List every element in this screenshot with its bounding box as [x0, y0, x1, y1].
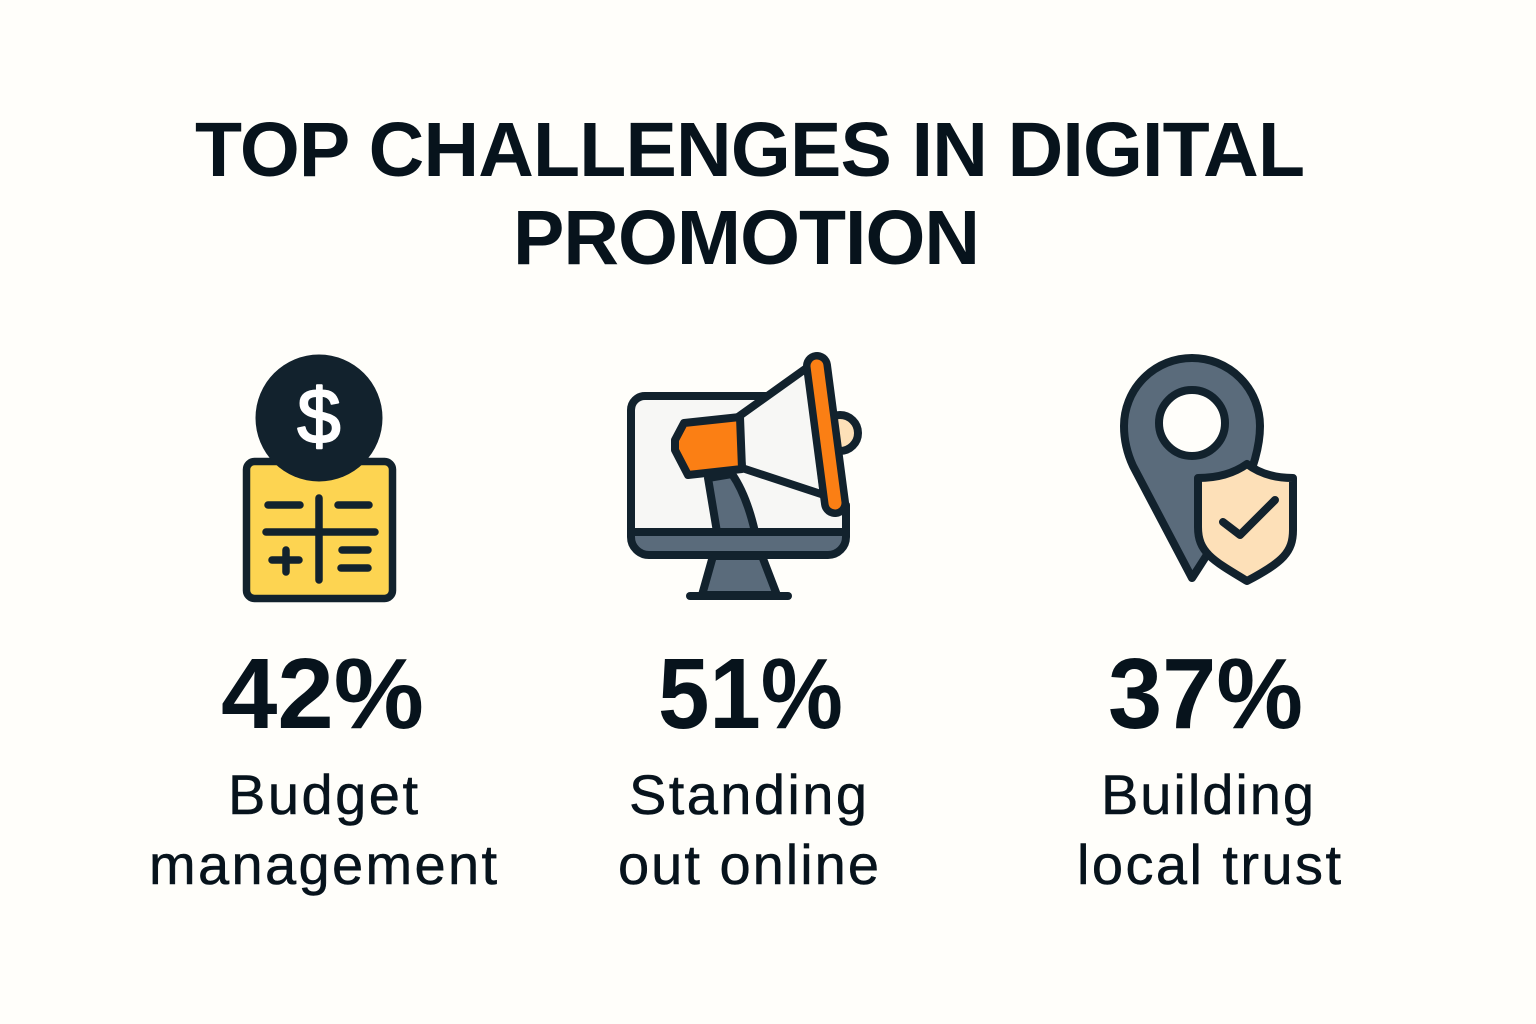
label: building local trust: Building — [1101, 763, 1314, 826]
panel: budget management — [149, 354, 497, 896]
icon: monitor with megaphone — [631, 366, 858, 596]
icon: budget calculator with dollar coin — [246, 354, 392, 598]
label: budget management: Budget — [228, 763, 418, 826]
label: building local trust — [1077, 763, 1341, 896]
stat: 51%: 51% — [658, 638, 843, 750]
panel: building local trust — [1077, 358, 1341, 896]
label: standing out online: out online — [618, 833, 879, 896]
label: budget management — [149, 763, 497, 896]
icon: location pin with shield — [1124, 358, 1293, 581]
label: standing out online: Standing — [629, 763, 867, 826]
stat: 37%: 37% — [1108, 638, 1303, 750]
label: budget management: management — [149, 833, 497, 896]
label: standing out online — [618, 763, 879, 896]
stat: 42%: 42% — [221, 638, 424, 750]
icon: budget calculator with dollar coin: $ — [297, 372, 341, 460]
panel: standing out online — [618, 366, 879, 896]
label: building local trust: local trust — [1077, 833, 1341, 896]
title: PROMOTION — [513, 195, 980, 281]
title — [195, 107, 1305, 281]
title: TOP CHALLENGES IN DIGITAL — [195, 107, 1305, 193]
